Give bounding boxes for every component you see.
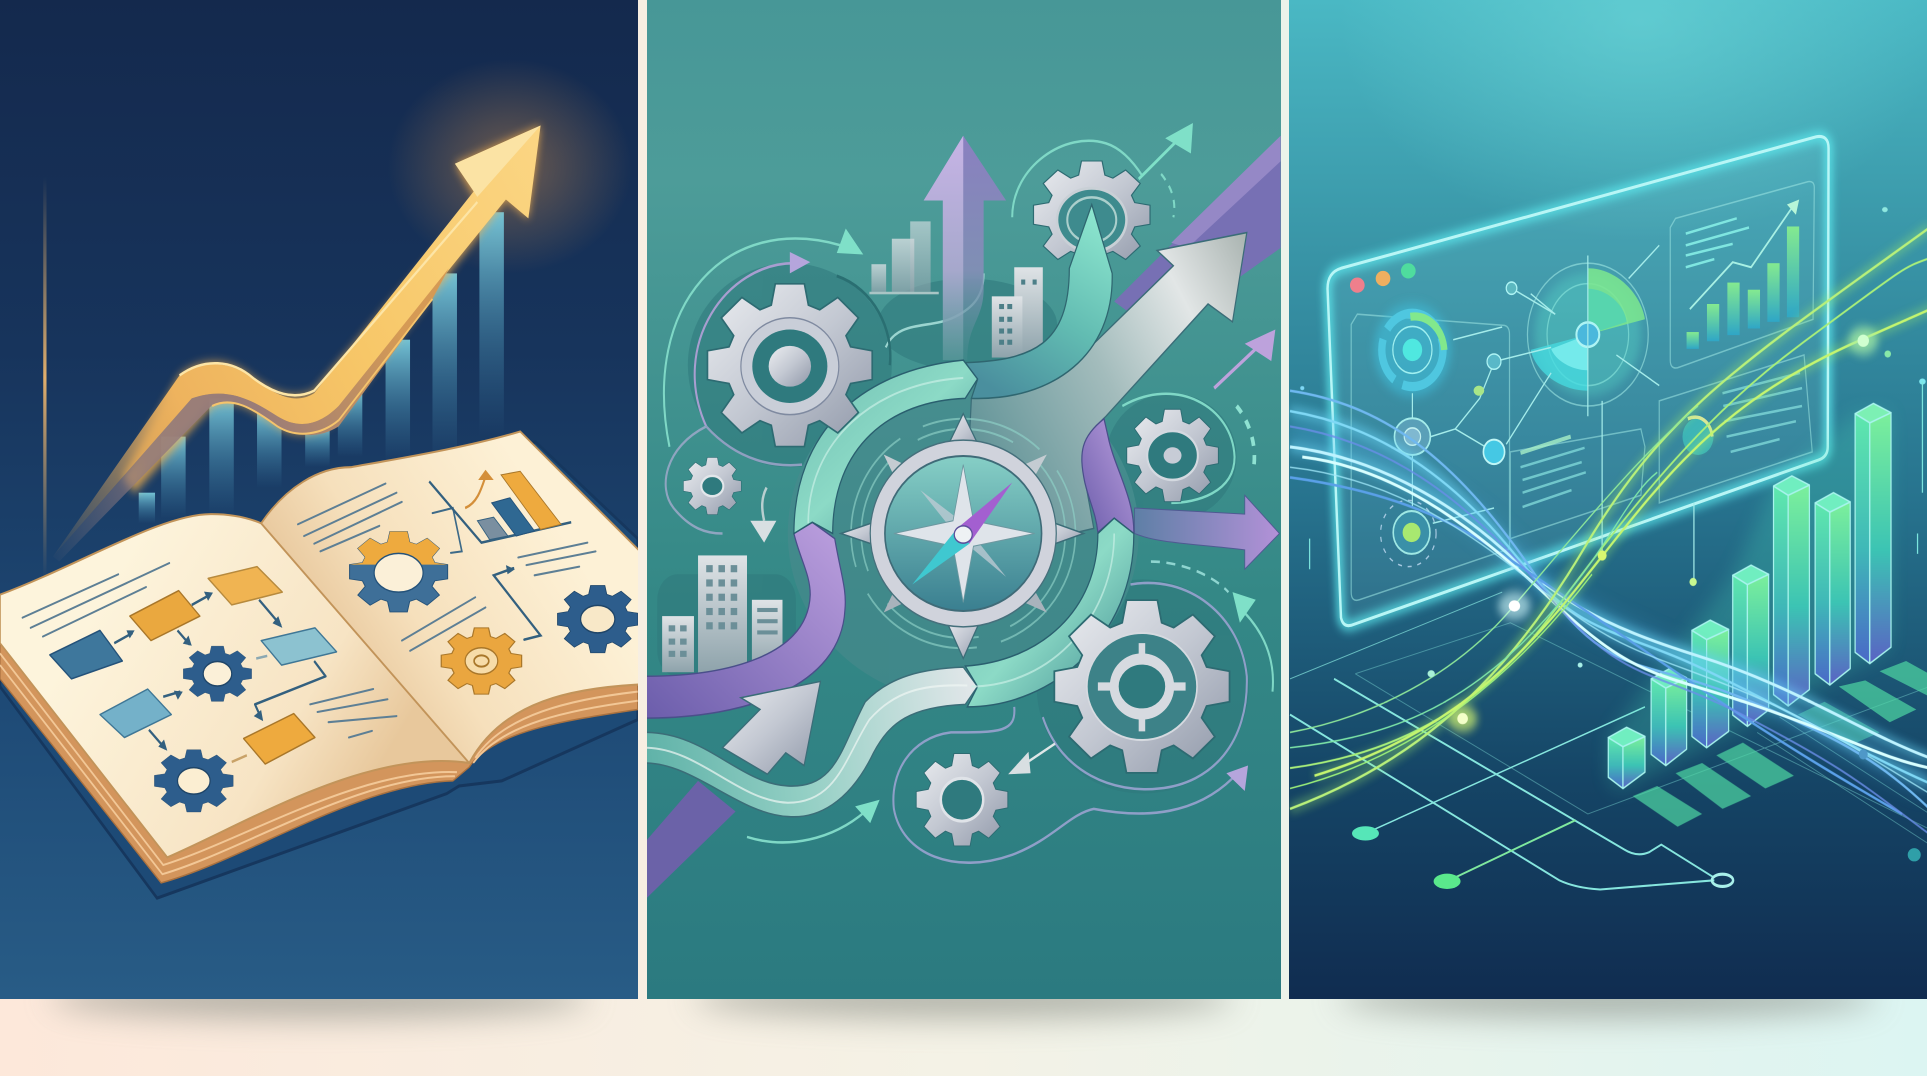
panel: strategy compass bbox=[645, 0, 1281, 999]
white arrow lower left bbox=[723, 681, 820, 774]
gear bottom bbox=[916, 754, 1008, 846]
lower city buildings bbox=[662, 555, 782, 673]
purple road on right bbox=[1082, 419, 1134, 534]
diagrams on right page bbox=[298, 470, 638, 694]
panel: analytics dashboard bbox=[1289, 0, 1927, 999]
circuit end nodes bbox=[1352, 826, 1921, 889]
gear top bbox=[1033, 161, 1150, 269]
purple right arrow bbox=[1135, 495, 1279, 569]
3D bar chart bbox=[1608, 403, 1891, 788]
glow behind arrow head bbox=[398, 69, 621, 264]
rising blue chart bars bbox=[139, 212, 504, 523]
mini bar chart with trend bbox=[1686, 199, 1799, 349]
purple road on left bbox=[645, 522, 845, 718]
big diagonal purple band bbox=[645, 136, 1281, 900]
floor grid and circuit lines bbox=[1290, 592, 1927, 889]
blue light streams bbox=[1290, 391, 1927, 834]
book cover bbox=[0, 442, 638, 898]
small gear left bbox=[683, 457, 741, 515]
vertical gold axis line bbox=[43, 176, 47, 579]
silver main road and large arrow bbox=[963, 233, 1247, 559]
green light streams bbox=[1290, 228, 1927, 809]
large gear lower right bbox=[1054, 600, 1230, 773]
bar chart on page bbox=[429, 470, 571, 543]
glowing sparkle nodes bbox=[1300, 207, 1926, 759]
compass bbox=[841, 414, 1084, 658]
upper city buildings bbox=[992, 267, 1043, 358]
donut widget bbox=[1374, 303, 1451, 397]
orange gear bbox=[441, 628, 522, 694]
dark backdrop circles bbox=[658, 264, 1236, 702]
floating dashboard window bbox=[1328, 136, 1829, 626]
page edges bbox=[0, 641, 638, 883]
open book bbox=[0, 432, 653, 898]
text lines on cards bbox=[1521, 373, 1802, 507]
inner card outlines bbox=[1351, 181, 1814, 600]
network nodes bbox=[1381, 282, 1714, 582]
gear right bbox=[1127, 409, 1218, 502]
window control dots bbox=[1350, 263, 1416, 293]
right page bbox=[261, 432, 653, 763]
glowing growth arrow bbox=[53, 126, 541, 562]
panel: growth playbook bbox=[0, 0, 653, 999]
compass ring arcs bbox=[794, 360, 1134, 707]
navy gear bbox=[558, 586, 638, 653]
small direction arrows bbox=[750, 123, 1275, 823]
blue and orange gear bbox=[350, 532, 448, 612]
wavy road lower bbox=[645, 667, 978, 817]
large gear upper left bbox=[707, 284, 872, 447]
radial gauge centre bbox=[1527, 245, 1659, 416]
curved guide lines bbox=[664, 141, 1273, 863]
flowchart on left page bbox=[22, 563, 397, 812]
rising purple arrow and mini bars bbox=[869, 136, 1006, 360]
ground pads bbox=[1633, 661, 1927, 827]
left page bbox=[0, 514, 469, 857]
teal swoosh into upper gear bbox=[965, 205, 1112, 398]
